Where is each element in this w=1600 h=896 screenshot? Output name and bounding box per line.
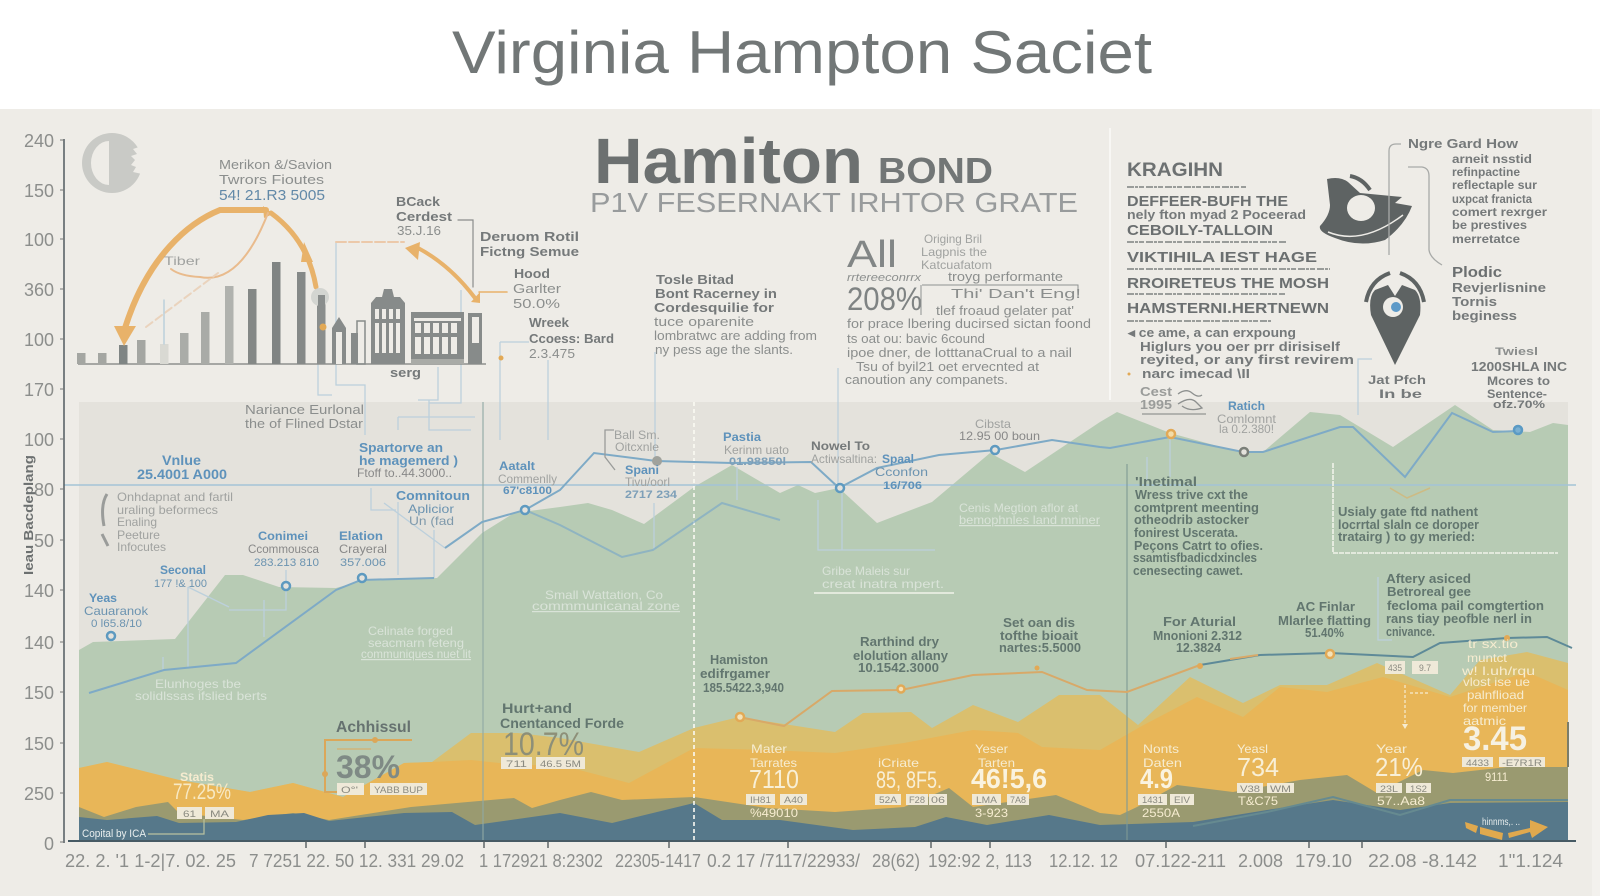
timeline labels: upper band: Nowel To xyxy=(811,439,870,453)
stat: Yeser 465.6: 46!5,6 xyxy=(971,763,1047,794)
y axis: 100 xyxy=(24,330,54,350)
panel: right column heading list: 1995 xyxy=(1140,397,1172,412)
stat: Nonts 4.9: 1431 xyxy=(1142,795,1163,806)
timeline labels: upper band: Enaling xyxy=(117,515,157,529)
callouts above bars: Fictng Semue xyxy=(480,244,579,259)
icon: crescent emblem xyxy=(82,133,142,193)
dark labels on green area: For Aturial xyxy=(1163,615,1236,629)
panel: right column heading list: Higlurs you oer prr dirisiself xyxy=(1140,339,1341,354)
text block: All 208%: canoution any companets. xyxy=(845,372,1008,387)
dark labels on green area: rans tiay peofble nerl in xyxy=(1386,612,1532,626)
stat: iCriate 85,8F5: 52A xyxy=(879,795,898,806)
callouts above bars: Hood xyxy=(514,266,550,281)
dark labels on green area: Peçons Catrt to ofies. xyxy=(1134,539,1263,553)
pale captions on green area: Gribe Maleis sur xyxy=(822,564,910,578)
stat: Yeser 465.6 xyxy=(971,742,1047,820)
y axis: 140 xyxy=(24,581,54,601)
callouts above bars: serg xyxy=(390,365,421,380)
data point markers xyxy=(107,426,1522,721)
stat: Achhissul 38%: YABB BUP xyxy=(374,785,423,796)
y axis: 150 xyxy=(24,734,54,754)
timeline labels: upper band: Oitcxnle xyxy=(615,440,659,454)
stat: Hurt and 10.7%: 10.7% xyxy=(503,726,584,762)
bar chart xyxy=(77,262,486,364)
timeline labels: upper band: Un (fad xyxy=(409,514,454,528)
pale captions on green area: commmunicanal zone xyxy=(532,599,680,613)
timeline labels: upper band: Aatalt xyxy=(499,459,535,473)
text block: All 208%: tlef froaud gelater pat' xyxy=(936,303,1074,318)
dark labels on green area: tratairg ) to gy meried: xyxy=(1338,530,1475,544)
stat: Statis 77.25%: 77.25% xyxy=(173,779,231,804)
callouts above bars: Cerdest xyxy=(396,209,453,224)
dark labels on green area: locrrtal slaln ce doroper xyxy=(1338,518,1479,532)
x axis: 12.12. 12 xyxy=(1049,851,1118,871)
right side callouts: 1200SHLA INC xyxy=(1471,359,1568,374)
stat: Achhissul 38%: O°' xyxy=(341,785,358,796)
dark labels on green area: 10.1542.3000 xyxy=(858,661,939,675)
timeline labels: upper band: Elation xyxy=(339,529,383,543)
text block: All 208%: Origing Bril xyxy=(924,232,982,246)
timeline labels: upper band: Cconfon xyxy=(875,465,928,479)
right side callouts: In be xyxy=(1379,387,1422,401)
timeline labels: upper band: Crayeral xyxy=(339,542,387,556)
stat: 3.45 right column: muntct xyxy=(1467,651,1508,665)
stat: 3.45 right column: 9.7 xyxy=(1419,663,1431,674)
y axis: 360 xyxy=(24,280,54,300)
dark labels on green area: comtprent meenting xyxy=(1134,501,1259,515)
stat: Nonts 4.9: 4.9 xyxy=(1140,763,1173,794)
timeline labels: upper band: Actiwsaltina: xyxy=(811,452,877,466)
timeline labels: upper band: Spartorve an xyxy=(359,440,443,455)
x axis: 22. 2. '1 1-2|7. 02. 25 xyxy=(65,851,236,871)
panel: right column heading list: HAMSTERNI.HERTNEWN xyxy=(1127,300,1329,317)
timeline labels: upper band: Kerinm uato xyxy=(724,443,789,457)
timeline labels: upper band: Commenlly xyxy=(498,472,557,486)
stat: Nonts 4.9: Daten xyxy=(1143,756,1182,770)
stat: Yeasl 734: V38 xyxy=(1240,784,1260,795)
timeline labels: upper band: the of Flined Dstar xyxy=(245,416,364,431)
right side callouts: arneit nsstid xyxy=(1452,152,1532,166)
icon: city buildings xyxy=(332,289,482,364)
stat: 3.45 right column: tr sx.tio xyxy=(1468,637,1518,651)
text block: All 208%: 208% xyxy=(847,281,922,317)
callouts above bars: Deruom Rotil xyxy=(480,229,579,244)
right side callouts: Plodic xyxy=(1452,264,1502,281)
text block: Tosle Bitad xyxy=(654,272,817,357)
stat: 3.45 right column: 3.45 xyxy=(1463,720,1527,758)
stat: iCriate 85,8F5: 06 xyxy=(931,795,945,806)
text block: All 208% xyxy=(845,232,1091,387)
stat: Achhissul 38%: 38% xyxy=(336,749,400,785)
callouts above bars: 54! 21.R3 5005 xyxy=(219,187,325,204)
y axis title: Ieau Bacdeplang xyxy=(21,455,36,575)
stat: Hurt and 10.7% xyxy=(500,700,624,770)
timeline labels: upper band: 25.4001 A000 xyxy=(137,466,227,482)
dark labels on green area: Wress trive cxt the xyxy=(1135,488,1248,502)
stat: Mater 7110: IH81 xyxy=(750,795,771,806)
pale captions on green area: Small Wattation, Co xyxy=(545,588,663,602)
callouts above bars: 50.0% xyxy=(513,296,561,311)
stat: iCriate 85,8F5 xyxy=(875,756,947,806)
dark labels on green area: Hamiston xyxy=(710,653,768,667)
stat: Year 21%: Year xyxy=(1376,742,1407,756)
stat: Yeasl 734: Yeasl xyxy=(1237,742,1268,756)
stat: iCriate 85,8F5: iCriate xyxy=(878,756,919,770)
dark labels on green area xyxy=(700,475,1544,695)
text block: All 208%: Lagpnis the xyxy=(921,245,987,259)
panel: right column heading list: Ratich xyxy=(1228,399,1265,413)
stat: Mater 7110: A40 xyxy=(784,795,803,806)
callouts above bars xyxy=(164,157,614,380)
timeline labels: upper band: 357.006 xyxy=(340,557,386,569)
timeline labels: upper band: Seconal xyxy=(160,563,206,577)
stat: Yeasl 734: WM xyxy=(1270,784,1291,795)
stat: Yeser 465.6: 7A8 xyxy=(1010,795,1026,806)
dark labels on green area: Mnonioni 2.312 xyxy=(1153,629,1242,643)
pale captions on green area: Cenis Megtion aflor at xyxy=(959,501,1079,515)
heading: Hamiton Bond: Hamiton xyxy=(594,125,863,197)
right side callouts: uxpcat franicta xyxy=(1452,192,1532,206)
timeline labels: upper band: Ftoff to..44.3000.. xyxy=(357,466,452,480)
stat: Mater 7110: Mater xyxy=(751,742,787,756)
panel: right column heading list: narc imecad \II xyxy=(1142,366,1250,381)
stat: Achhissul 38% xyxy=(322,719,427,796)
pale captions on green area: communiques nuet lit xyxy=(361,647,472,661)
right side callouts: Jat Pfch xyxy=(1368,373,1426,387)
right side callouts: beginess xyxy=(1452,308,1517,323)
stat: 3.45 right column: w! l.uh/rqu xyxy=(1461,664,1535,678)
dark labels on green area: Aftery asiced xyxy=(1386,572,1471,586)
text block: Tosle Bitad: tuce oparenite xyxy=(654,314,754,329)
timeline labels: upper band: 177 !& 100 xyxy=(154,578,207,590)
dark labels on green area: Set oan dis xyxy=(1003,616,1075,630)
right side callouts: be prestives xyxy=(1452,218,1527,232)
timeline labels: upper band: Infocutes xyxy=(117,540,166,554)
timeline labels: upper band: Yeas xyxy=(89,591,117,605)
stat: iCriate 85,8F5: F28 xyxy=(909,795,925,806)
timeline labels: upper band: 16/706 xyxy=(883,480,922,492)
panel: right column heading list: KRAGIHN xyxy=(1127,160,1223,181)
right side callouts xyxy=(1368,136,1568,411)
pale captions on green area: solidlssas ifslied berts xyxy=(135,689,267,703)
text block: All 208%: for prace lbering ducirsed sictan foond xyxy=(847,316,1091,331)
stacked area chart xyxy=(79,405,1568,841)
chart band background xyxy=(79,402,1568,841)
right side callouts: refinpactine xyxy=(1452,165,1520,179)
heading: Hamiton Bond xyxy=(590,125,1078,218)
timeline labels: upper band: Vnlue xyxy=(162,452,201,468)
pale connector lines xyxy=(163,242,1392,670)
y axis: 150 xyxy=(24,683,54,703)
text block: All 208%: Katcuafatom xyxy=(921,258,992,272)
text block: Tosle Bitad: lombratwc are adding from xyxy=(654,328,817,343)
stat: 3.45 right column xyxy=(1385,637,1568,784)
stat: Hurt and 10.7%: 46.5 5M xyxy=(540,759,581,770)
stat: Hurt and 10.7%: Hurt+and xyxy=(502,700,572,716)
timeline labels: upper band: Conimei xyxy=(258,529,308,543)
timeline labels: upper band: Spaal xyxy=(882,452,914,466)
x axis: 7 7251 22. 50 12. 331 29.02 xyxy=(249,851,464,871)
panel: right column heading list: DEFFEER-BUFH THE xyxy=(1127,193,1288,210)
dark labels on green area: Mlarlee flatting xyxy=(1278,614,1371,628)
timeline labels: upper band: Pastia xyxy=(723,430,761,444)
dark labels on green area: 12.3824 xyxy=(1176,641,1221,655)
stat: 3.45 right column: vlost ise ue xyxy=(1463,675,1530,689)
x axis: 1 172921 8:2302 xyxy=(479,851,603,871)
timeline labels: upper band: 0 l65.8/10 xyxy=(91,618,142,630)
stat: Statis 77.25%: Copital by ICA xyxy=(82,828,147,840)
callouts above bars: Wreek xyxy=(529,315,570,330)
timeline labels: upper band: uraling beformecs xyxy=(117,503,218,517)
timeline labels: upper band: Ccommousca xyxy=(248,542,319,556)
callouts above bars: Twrors Fioutes xyxy=(219,172,325,187)
text block: Tosle Bitad: Cordesquilie for xyxy=(654,300,774,315)
dark labels on green area: edifrgamer xyxy=(700,667,770,681)
dark labels on green area: AC Finlar xyxy=(1296,600,1355,614)
x axis: 22.08 -8.142 xyxy=(1368,851,1477,871)
text block: All 208%: ts oat ou: bavic 6cound xyxy=(847,331,985,346)
stat: Mater 7110: Tarrates xyxy=(750,756,797,770)
reference lines xyxy=(64,402,1576,841)
stat: 3.45 right column: 4433 xyxy=(1466,758,1489,769)
stat: 3.45 right column: palnflioad xyxy=(1467,688,1524,702)
stat: Hurt and 10.7%: Cnentanced Forde xyxy=(500,715,624,731)
right side callouts: Mcores to xyxy=(1487,374,1550,388)
stat: Yeasl 734: 734 xyxy=(1237,752,1279,782)
pale captions on green area: bemophnles land mniner xyxy=(959,513,1100,527)
pale captions on green area: Elunhoges tbe xyxy=(155,677,241,691)
dark labels on green area: Rarthind dry xyxy=(860,635,939,649)
stat: Year 21%: 23L xyxy=(1380,784,1398,795)
panel: right column heading list: reyited, or any first revirem xyxy=(1140,352,1354,367)
y axis: 50 xyxy=(34,531,54,551)
text block: All 208%: Thi' Dan't Eng! xyxy=(951,286,1081,301)
panel: right column heading list: Cest xyxy=(1140,384,1173,399)
text block: All 208%: rrtereeconrrx xyxy=(847,272,922,284)
orange and teal trend line xyxy=(739,637,1572,826)
callouts above bars: Merikon &/Savion xyxy=(219,157,332,172)
stat: Nonts 4.9: Nonts xyxy=(1143,742,1179,756)
dark labels on green area: tofthe bioait xyxy=(1000,629,1079,643)
stat: 3.45 right column: aatmic xyxy=(1463,714,1506,728)
arrow: bottom right orange xyxy=(1465,817,1548,840)
stat: Statis 77.25%: Statis xyxy=(180,770,214,784)
stat: Yeser 465.6: LMA xyxy=(976,795,998,806)
dark labels on green area: cenesecting cawet. xyxy=(1133,564,1243,578)
dark labels on green area: 'Inetimal xyxy=(1135,475,1197,489)
text block: All 208%: All xyxy=(847,234,897,276)
x axis: 22305-1417 xyxy=(615,851,701,871)
panel: right column heading list: nely fton myad 2 Poceerad xyxy=(1127,207,1306,222)
right side callouts: Ngre Gard How xyxy=(1408,136,1519,151)
timeline labels: upper band: he magemerd ) xyxy=(359,453,458,468)
right side callouts: Tornis xyxy=(1452,294,1497,309)
timeline labels: upper band xyxy=(84,402,1040,630)
stat: Mater 7110: 7110 xyxy=(749,764,799,794)
text block: All 208%: ipoe dner, de lotttanaCrual to a nail xyxy=(847,345,1072,360)
heading: Hamiton Bond: BOND xyxy=(878,150,993,191)
timeline labels: upper band: Aplicior xyxy=(408,502,454,516)
timeline labels: upper band: 01.98850l xyxy=(729,456,786,468)
timeline labels: upper band: Comnitoun xyxy=(396,488,470,503)
text block: Tosle Bitad: ny pess age the slants. xyxy=(655,342,793,357)
right side callouts: Twiesl xyxy=(1495,346,1538,358)
icon: dark blob emblem xyxy=(1320,176,1412,244)
stat: iCriate 85,8F5: 85, 8F5. xyxy=(876,767,942,794)
timeline labels: upper band: Onhdapnat and fartil xyxy=(117,490,233,504)
right side callouts: Revjerlisnine xyxy=(1452,280,1546,295)
dark labels on green area: ssamtisfbadicdxincles xyxy=(1133,551,1257,565)
timeline labels: upper band: 283.213 810 xyxy=(254,557,319,569)
pale captions on green area xyxy=(135,501,1100,703)
timeline labels: upper band: Cauaranok xyxy=(84,604,149,618)
panel: right column heading list: VIKTIHILA IEST HAGE xyxy=(1127,249,1317,266)
y axis: 100 xyxy=(24,430,54,450)
y axis: 140 xyxy=(24,633,54,653)
text block: Tosle Bitad: Bont Racerney in xyxy=(655,286,777,301)
timeline labels: upper band: 12.95 00 boun xyxy=(959,429,1040,443)
panel: right column heading list xyxy=(1110,128,1354,436)
x axis: 0.2 17 /7117/22933/ xyxy=(707,851,860,871)
x axis: 28(62) xyxy=(872,851,920,871)
y axis: 80 xyxy=(34,480,54,500)
timeline labels: upper band: Ball Sm. xyxy=(614,428,660,442)
y axis: 0 xyxy=(44,834,54,854)
arrow: bottom right orange: hinnms,. .. xyxy=(1482,817,1520,828)
right side callouts: merretatce xyxy=(1452,232,1520,246)
x axis: 179.10 xyxy=(1295,851,1352,871)
timeline labels: upper band: Nariance Eurlonal xyxy=(245,402,364,417)
right side callouts: ofz.70% xyxy=(1493,399,1545,411)
dark labels on green area: fonirest Uscerata. xyxy=(1134,526,1238,540)
timeline labels: upper band: 67'c8100 xyxy=(503,485,552,497)
x axis: 1"1.124 xyxy=(1498,851,1563,871)
stat: Yeasl 734: T&C75 xyxy=(1238,794,1278,808)
dark labels on green area: 51.40% xyxy=(1305,626,1344,640)
stat: Statis 77.25%: 61 xyxy=(183,809,196,820)
icon: map pin xyxy=(1366,273,1424,365)
stat: Year 21%: 57..Aa8 xyxy=(1377,794,1425,808)
stat: Mater 7110: %49010 xyxy=(750,806,798,820)
right side callouts: reflectaple sur xyxy=(1452,178,1537,192)
timeline labels: upper band: Spani xyxy=(625,463,659,477)
stat: Yeser 465.6: Yeser xyxy=(975,742,1008,756)
callouts above bars: 2.3.475 xyxy=(529,346,575,361)
x axis: 2.008 xyxy=(1238,851,1283,871)
dark labels on green area: fecloma pail comgtertion xyxy=(1387,599,1544,613)
stat: Mater 7110 xyxy=(746,742,807,820)
blue trend line xyxy=(89,413,1518,693)
stat: Nonts 4.9: EIV xyxy=(1174,795,1191,806)
text block: All 208%: Tsu of byil21 oet ervecnted at xyxy=(856,359,1039,374)
stat: Statis 77.25% xyxy=(82,770,234,840)
y axis: 150 xyxy=(24,181,54,201)
panel: right column heading list: la 0.2.380! xyxy=(1219,422,1274,436)
timeline labels: upper band: Cibsta xyxy=(975,417,1011,431)
y axis: 170 xyxy=(24,380,54,400)
y axis xyxy=(24,131,1576,854)
stat: 3.45 right column: 9111 xyxy=(1485,770,1508,784)
pale captions on green area: seacmarn feteng xyxy=(368,636,464,650)
right side callouts: comert rexrger xyxy=(1452,205,1547,219)
y axis: 250 xyxy=(24,784,54,804)
dark labels on green area: 185.5422.3,940 xyxy=(703,681,784,695)
panel: right column heading list: Comlomnt xyxy=(1217,412,1277,426)
stat: 3.45 right column: 435 xyxy=(1388,663,1402,674)
stat: Nonts 4.9 xyxy=(1138,742,1194,820)
dark labels on green area: Usialy gate ftd nathent xyxy=(1338,505,1479,519)
x axis: 192:92 2, 113 xyxy=(928,851,1032,871)
callouts above bars: 35.J.16 xyxy=(397,223,441,238)
pale captions on green area: Celinate forged xyxy=(368,624,453,638)
timeline labels: upper band: Tivu/oorl xyxy=(625,475,670,489)
text block: Tosle Bitad: Tosle Bitad xyxy=(656,272,734,287)
stat: Nonts 4.9: 2550A xyxy=(1142,806,1180,820)
panel: right column heading list: ◂ ce ame, a can erxpoung xyxy=(1127,325,1296,340)
stat: Hurt and 10.7%: 711 xyxy=(506,759,527,770)
stat: 3.45 right column: for member xyxy=(1463,701,1527,715)
pale captions on green area: creat inatra mpert. xyxy=(822,577,944,591)
right side callouts: Sentence- xyxy=(1487,387,1547,401)
stat: Yeasl 734 xyxy=(1237,742,1294,808)
heading: Hamiton Bond: P1V FESERNAKT IRHTOR GRATE xyxy=(590,187,1078,218)
callouts above bars: Ccoess: Bard xyxy=(529,331,614,346)
dark labels on green area: Betroreal gee xyxy=(1387,585,1471,599)
stat: Statis 77.25%: MA xyxy=(210,809,230,820)
timeline labels: upper band: Peeture xyxy=(117,528,160,542)
dark labels on green area: cnivance. xyxy=(1386,625,1435,639)
x axis: 07.122-211 xyxy=(1135,851,1226,871)
panel: right column heading list: RROIRETEUS THE MOSH xyxy=(1127,275,1329,292)
y axis: 240 xyxy=(24,131,54,151)
orange arc arrows xyxy=(114,206,507,360)
stat: Yeser 465.6: 3-923 xyxy=(975,806,1008,820)
stat: Achhissul 38%: Achhissul xyxy=(336,719,411,736)
text block: All 208%: troyg performante xyxy=(948,269,1063,284)
x axis xyxy=(65,841,1563,871)
callouts above bars: Tiber xyxy=(164,254,200,268)
stat: 3.45 right column: -E7R1R xyxy=(1502,758,1542,769)
callouts above bars: BCack xyxy=(396,194,441,209)
timeline labels: upper band: 2717 234 xyxy=(625,489,678,501)
title: Virginia Hampton Saciet xyxy=(452,19,1152,86)
callouts above bars: Garlter xyxy=(513,281,562,296)
stat: Year 21% xyxy=(1375,742,1431,808)
stat: Yeser 465.6: Tarten xyxy=(978,756,1015,770)
y axis: 100 xyxy=(24,230,54,250)
stat: Year 21%: 1S2 xyxy=(1410,784,1427,795)
dark labels on green area: nartes:5.5000 xyxy=(999,641,1081,655)
dark labels on green area: elolution allany xyxy=(853,649,948,663)
stat: Year 21%: 21% xyxy=(1375,752,1423,782)
dark labels on green area: otheodrib astocker xyxy=(1134,513,1249,527)
panel: right column heading list: CEBOILY-TALLOIN xyxy=(1127,222,1273,239)
